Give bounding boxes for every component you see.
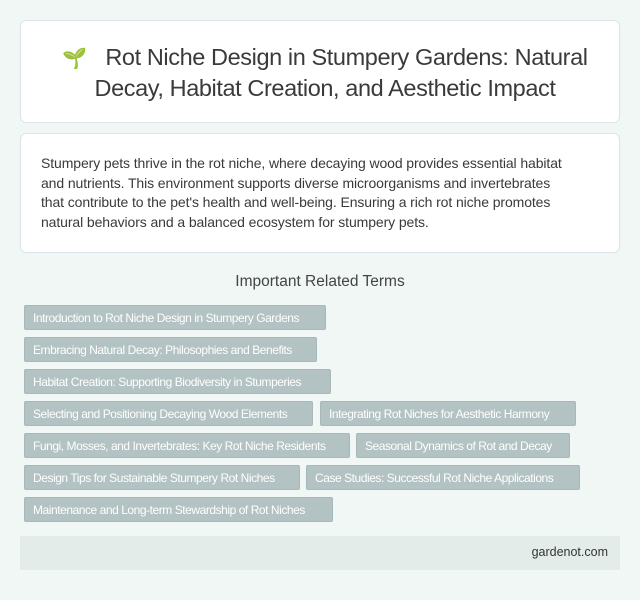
tag 9	[306, 465, 580, 490]
related terms heading: Important Related Terms	[235, 273, 405, 290]
tag 4: Selecting and Positioning Decaying Wood Elements	[33, 407, 287, 421]
summary card	[20, 133, 620, 253]
footer	[20, 536, 620, 570]
tag 4	[24, 401, 313, 426]
tag 10: Maintenance and Long-term Stewardship of Rot Niches	[33, 503, 305, 517]
header card	[20, 20, 620, 123]
tag 7	[356, 433, 570, 458]
summary text: Stumpery pets thrive in the rot niche, where decaying wood provides essential habitat	[41, 155, 562, 171]
tag 1	[24, 305, 326, 330]
title: 🌱 Rot Niche Design in Stumpery Gardens: Natural Decay, Habitat Creation, and Aesthetic Impact	[62, 44, 588, 101]
tag 5: Integrating Rot Niches for Aesthetic Harmony	[329, 407, 549, 421]
tag 6	[24, 433, 350, 458]
tag 10	[24, 497, 333, 522]
tag 8	[24, 465, 300, 490]
footer source: gardenot.com	[532, 545, 608, 559]
tag 2: Embracing Natural Decay: Philosophies and Benefits	[33, 343, 292, 357]
tag 2	[24, 337, 317, 362]
tag 3	[24, 369, 331, 394]
summary text: natural behaviors and a balanced ecosystem for stumpery pets.	[41, 214, 429, 230]
tag 6: Fungi, Mosses, and Invertebrates: Key Rot Niche Residents	[33, 439, 326, 453]
tag 5	[320, 401, 576, 426]
tag 7: Seasonal Dynamics of Rot and Decay	[365, 439, 552, 453]
tag 9: Case Studies: Successful Rot Niche Applications	[315, 471, 553, 485]
tag 3: Habitat Creation: Supporting Biodiversity in Stumperies	[33, 375, 301, 389]
summary text	[41, 155, 562, 230]
tag 1: Introduction to Rot Niche Design in Stumpery Gardens	[33, 311, 299, 325]
summary text: and nutrients. This environment supports diverse microorganisms and invertebrates	[41, 174, 550, 190]
tag 8: Design Tips for Sustainable Stumpery Rot Niches	[33, 471, 275, 485]
summary text: that contribute to the pet's health and well-being. Ensuring a rich rot niche promotes	[41, 194, 550, 210]
